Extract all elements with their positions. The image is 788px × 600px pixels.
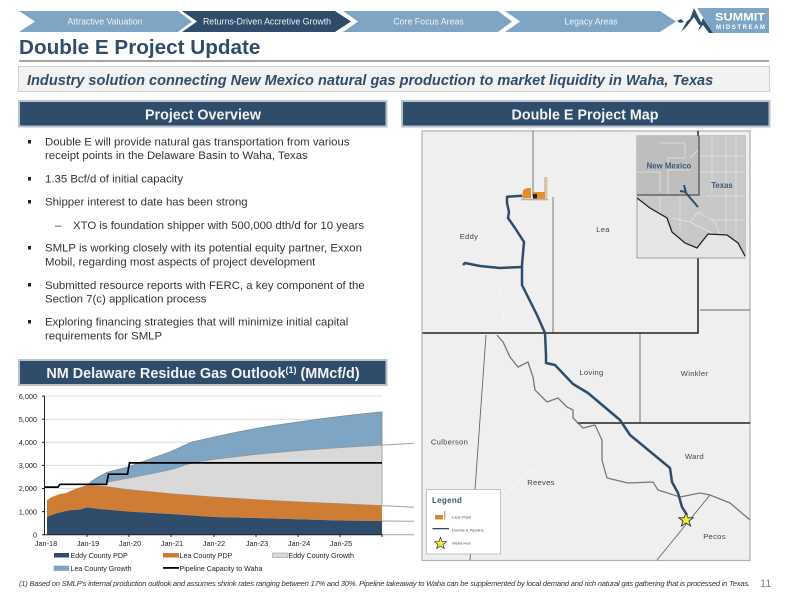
project overview bullets [28,137,365,342]
x axis labels: Jan-20 [119,539,141,548]
heading: NM Delaware Residue Gas Outlook [19,360,386,385]
heading: Double E Project Map: Double E Project Map [512,108,659,124]
nav: Returns-Driven Accretive Growth [182,11,351,32]
legend: Lea County PDP: Lea County PDP [180,552,233,560]
heading: NM Delaware Residue Gas Outlook: (MMcf/d) [296,366,360,382]
x axis labels: Jan-22 [203,539,225,548]
icon: Waha Hub star [679,513,693,526]
legend: Eddy County PDP: Eddy County PDP [70,552,128,560]
area: Eddy County Growth [87,445,382,506]
nav: Core Focus Areas: Core Focus Areas [393,16,464,26]
chart axes [42,396,382,537]
nav: Legacy Areas: Legacy Areas [564,16,618,26]
bullet: transportation: receipt points in the Delaware Basin to Waha, Texas [45,150,308,162]
county labels: Eddy [460,232,478,241]
x axis labels: Jan-21 [161,539,183,548]
legend: Eddy County Growth: Eddy County Growth [288,552,354,560]
heading: NM Delaware Residue Gas Outlook: NM Delaware Residue Gas Outlook [46,366,285,382]
nav: Attractive Valuation [19,11,192,32]
inset labels: Texas [711,181,733,190]
y axis labels: 5,000 [19,415,37,424]
map legend: Lane Plant [452,514,472,520]
bullet: FERC [28,280,365,306]
map roads [444,148,750,555]
title: Double E Project Update [19,36,260,59]
inset locator map [637,136,745,258]
bullet: capacity: 1.35 Bcf/d of initial capacity [45,174,183,186]
bullet: financing: requirements for SMLP [45,330,162,342]
x axis labels: Jan-25 [330,539,352,548]
bullet: FERC: Section 7(c) application process [45,294,207,306]
county labels [431,225,726,541]
x axis labels: Jan-24 [288,539,310,548]
heading: NM Delaware Residue Gas Outlook: (1) [285,365,296,375]
area: Lea County Growth [87,412,382,485]
inset labels [647,162,733,190]
x axis labels: Jan-18 [35,539,57,548]
nav: Legacy Areas [505,11,676,32]
county labels: Culberson [431,438,468,446]
map legend [426,490,500,554]
line: pipeline capacity to Waha [45,463,382,487]
subtitle banner: Industry solution connecting New Mexico natural gas production to market liquidity in Waha, Texas [27,73,713,89]
county borders [470,131,750,560]
navigation chevrons [19,11,676,32]
y axis labels: 3,000 [19,461,37,470]
legend: Pipeline Capacity to Waha: Pipeline Capacity to Waha [180,565,262,573]
y axis labels: 1,000 [19,507,37,516]
county labels: Loving [579,368,604,377]
nav: Attractive Valuation: Attractive Valuation [67,16,143,26]
map legend: Legend [432,496,462,505]
subtitle banner [18,66,770,92]
nav: Returns-Driven Accretive Growth: Returns-Driven Accretive Growth [203,16,331,26]
county labels: Ward [685,452,704,461]
logo: Summit Midstream: MIDSTREAM [716,25,765,31]
area: Lea County PDP [47,485,382,521]
inset labels: New Mexico [647,162,692,170]
project map [422,131,750,560]
Pecos river [497,335,750,520]
projection lines past chart [382,443,414,535]
y axis labels: 6,000 [19,392,37,401]
county labels: Winkler [681,369,708,378]
county labels: Lea [596,225,610,234]
y axis labels: 0 [33,530,37,540]
inset pipeline [680,185,698,207]
sub-bullet: XTO: – [55,220,62,232]
county labels: Pecos [703,532,726,541]
bullet: SMLP and Exxon: Mobil, regarding most aspects of project development [45,256,316,268]
bullet: transportation [28,137,350,162]
bullet: financing: Exploring financing strategies that will minimize initial capital [45,317,348,329]
logo: Summit Midstream: SUMMIT [715,12,765,24]
heading: Project Overview: Project Overview [145,108,262,124]
y axis labels: 2,000 [19,484,37,493]
x axis labels: Jan-19 [77,539,99,548]
bullet: transportation: Double E will provide natural gas transportation from various [45,137,350,149]
map legend: Waha Hub [452,540,472,546]
footnote: (1) Based on SMLP's internal production outlook and assumes shrink rates ranging between 17% and 30%. Pipeline takeaway to Waha can be supplemented by local demand and rich natural gas gathering that is processed in Texas. [19,579,750,588]
x axis labels [35,539,352,548]
bullet: SMLP and Exxon [28,243,362,268]
state line: New Mexico / Texas [422,131,750,423]
sub-bullet: XTO: XTO is foundation shipper with 500,000 dth/d for 10 years [73,220,364,232]
area chart: gas outlook [19,392,414,548]
chart legend [54,552,354,573]
x axis labels: Jan-23 [246,539,268,548]
area: Eddy County PDP [47,507,382,535]
logo: Summit Midstream [677,8,769,33]
icon: processing plant [521,177,548,200]
y axis labels [19,392,37,540]
bullet: SMLP and Exxon: SMLP is working closely with its potential equity partner, Exxon [45,243,362,255]
bullet: FERC: Submitted resource reports with FERC, a key component of the [45,280,365,292]
legend: Lea County Growth: Lea County Growth [70,565,132,573]
pipeline route [463,196,687,515]
county labels: Reeves [527,478,555,487]
nav: Core Focus Areas [343,11,512,32]
bullet: shipper interest: Shipper interest to date has been strong [45,197,248,209]
y axis labels: 4,000 [19,438,37,447]
heading: Double E Project Map [402,101,770,126]
bullet: financing [28,317,348,342]
heading: Project Overview [19,101,386,126]
page number: 11 [760,578,771,590]
map legend: Double E Pipeline [452,528,485,532]
